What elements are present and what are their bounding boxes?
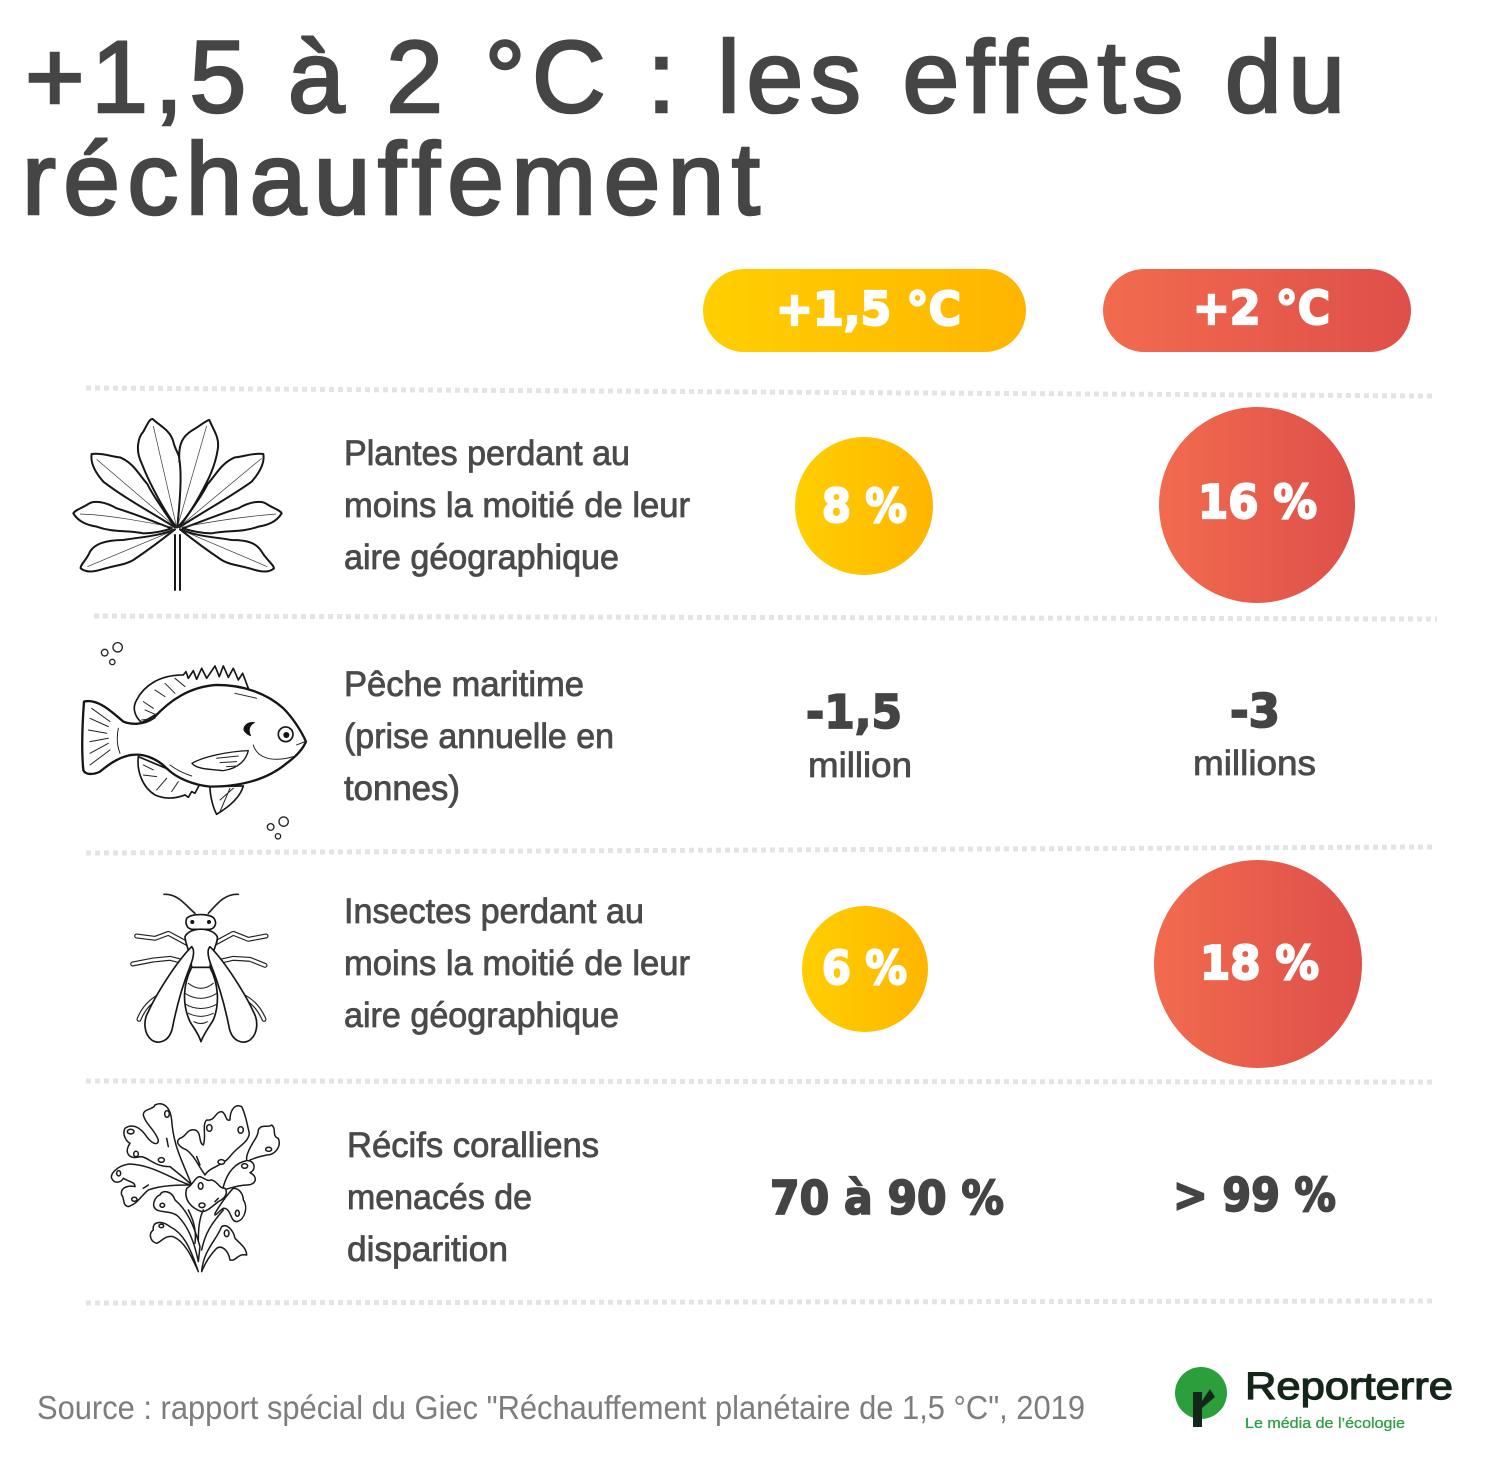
text: plantes <box>344 434 690 577</box>
value: plantes 16 % <box>1159 407 1355 603</box>
value: insectes 18 %: 18 % <box>1200 936 1319 990</box>
icon: leaf <box>73 419 282 590</box>
title: +1,5 à 2 °C : les effets du <box>25 20 1345 134</box>
value: plantes 8 %: 8 % <box>822 479 907 533</box>
text: plantes: moins la moitié de leur <box>344 486 690 525</box>
logo: Reporterre <box>1175 1366 1453 1432</box>
column header: +1,5 °C: +1,5 °C <box>776 282 961 336</box>
text: pêche: tonnes) <box>344 769 460 808</box>
text: insectes <box>344 892 690 1035</box>
value: pêche -1,5 million: million <box>808 746 912 785</box>
value: insectes 18 % <box>1154 860 1362 1068</box>
value: plantes 16 %: 16 % <box>1198 475 1317 529</box>
value: pêche -1,5 million: -1,5 <box>806 685 902 739</box>
text: plantes: Plantes perdant au <box>344 434 630 473</box>
text: récifs: disparition <box>347 1230 508 1269</box>
text: récifs: menacés de <box>347 1178 532 1217</box>
column header: +2 °C <box>1103 269 1411 352</box>
text: pêche <box>344 665 614 808</box>
source: Source : rapport spécial du Giec "Réchauffement planétaire de 1,5 °C", 2019 <box>37 1389 1085 1426</box>
text: insectes: aire géographique <box>344 996 619 1035</box>
value: pêche -3 millions <box>1193 684 1316 783</box>
text: récifs <box>347 1126 599 1269</box>
value: plantes 8 % <box>795 437 933 575</box>
text: récifs: Récifs coralliens <box>347 1126 599 1165</box>
column header: +1,5 °C <box>703 269 1026 352</box>
value: insectes 6 %: 6 % <box>822 941 907 995</box>
text: insectes: moins la moitié de leur <box>344 944 690 983</box>
icon: insect <box>133 894 266 1042</box>
logo: Reporterre: Reporterre <box>1245 1366 1453 1408</box>
column header: +2 °C: +2 °C <box>1193 281 1330 335</box>
value: insectes 6 % <box>802 906 928 1032</box>
value: récifs > 99 %: > 99 % <box>1173 1168 1336 1222</box>
text: insectes: Insectes perdant au <box>344 892 644 931</box>
value: pêche -1,5 million <box>806 685 912 785</box>
text: pêche: (prise annuelle en <box>344 717 614 756</box>
title: réchauffement <box>22 122 760 236</box>
value: pêche -3 millions: millions <box>1193 744 1316 783</box>
value: pêche -3 millions: -3 <box>1230 684 1280 738</box>
text: pêche: Pêche maritime <box>344 665 584 704</box>
logo: Reporterre: Le média de l’écologie <box>1245 1415 1405 1432</box>
icon: fish <box>82 643 306 839</box>
title <box>22 20 1345 236</box>
value: récifs 70 à 90 %: 70 à 90 % <box>770 1171 1004 1225</box>
text: plantes: aire géographique <box>344 538 619 577</box>
icon: coral <box>111 1104 279 1272</box>
